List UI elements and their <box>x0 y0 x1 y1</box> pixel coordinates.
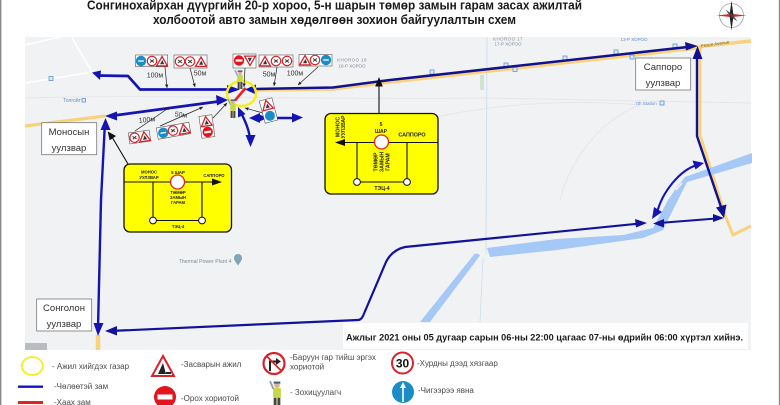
date notice <box>343 323 748 349</box>
distance labels <box>138 70 303 125</box>
legend: go straight <box>392 381 474 403</box>
location label text: уулзвар <box>52 143 86 154</box>
callout panel: junction scheme west: УУЛЗВАР <box>139 175 159 180</box>
callout panel: junction scheme east <box>325 114 438 194</box>
distance labels: 100м <box>287 70 303 78</box>
legend: road works <box>152 356 242 376</box>
map labels <box>25 36 730 350</box>
local bypass arrows <box>238 107 303 147</box>
map labels: Thermal Power Plant 4 <box>179 259 231 265</box>
legend: no right turn: -Баруун гар тийш эргэх <box>290 353 376 362</box>
roads <box>25 41 751 350</box>
sign panel F <box>128 130 151 144</box>
route: main top line <box>92 42 698 94</box>
legend: work site <box>22 357 130 375</box>
legend: open road: -Чөлөөтэй зам <box>54 382 108 391</box>
map labels: 17-Р ХОРОО <box>494 42 522 46</box>
map <box>25 37 751 350</box>
location label text: Сонголон <box>43 303 85 314</box>
map labels: 13-Р ХОРОО <box>620 37 648 42</box>
sign panel G <box>156 122 191 139</box>
distance labels: 50м <box>174 111 188 120</box>
callout panel: junction scheme east: МОНОС <box>336 117 342 137</box>
callout panel: junction scheme east: УУЛЗВАР <box>341 115 347 138</box>
route: lower and left lines <box>94 95 228 336</box>
legend: speed limit <box>392 352 498 374</box>
route: east line <box>652 46 726 219</box>
traffic officers <box>228 70 243 118</box>
callout panel: junction scheme west: МОНОС <box>141 170 157 174</box>
map labels: KHOROO 18 <box>337 58 367 62</box>
callout panel: junction scheme west: ТӨМӨР <box>170 190 186 195</box>
map labels: Peace Avenue <box>700 39 730 48</box>
location label text: Моносын <box>49 127 89 138</box>
legend: no right turn: хориотой <box>290 362 324 372</box>
map labels: 18-Р ХОРОО <box>338 64 366 68</box>
map labels: 7th Station <box>635 101 657 106</box>
legend: traffic officer <box>270 381 341 405</box>
sign panel I <box>259 98 278 123</box>
legend: no right turn <box>264 353 376 374</box>
legend: road works: -Засварын ажил <box>181 360 242 369</box>
distance labels: 50м <box>263 72 275 78</box>
title: холбоотой авто замын хөдөлгөөн зохион байгуулалтын схем <box>153 13 516 27</box>
location label text <box>43 62 682 330</box>
location label text: уулзвар <box>47 319 81 330</box>
closure zone <box>227 81 256 106</box>
callout panel: junction scheme east: ГАРАМ <box>386 153 392 171</box>
distance labels: 50м <box>194 70 206 78</box>
sign panel D <box>259 55 293 67</box>
sign panel E <box>299 54 332 66</box>
callout panel: junction scheme west: ЗАМЫН <box>170 195 186 200</box>
callout panel: junction scheme east: ТЭЦ-4 <box>374 186 390 192</box>
legend: speed limit: -Хурдны дээд хязгаар <box>417 359 498 368</box>
legend: no entry <box>154 386 239 405</box>
location labels <box>37 58 691 331</box>
sign pointers <box>135 67 318 131</box>
callout panel: junction scheme east: ШАР <box>375 129 388 135</box>
location label text: уулзвар <box>646 78 680 89</box>
legend: work site: - Ажил хийгдэх газар <box>52 362 130 371</box>
sign panel C <box>233 54 256 68</box>
map labels: Толгойт <box>63 97 82 104</box>
legend: no entry: -Орох хориотой <box>181 394 239 403</box>
title <box>87 0 582 27</box>
callout panel: junction scheme west: ГАРАМ <box>171 200 186 205</box>
callout panel: junction scheme east: 5 <box>380 122 383 128</box>
sign panel B <box>174 55 207 68</box>
callout panel: junction scheme west: 5 ШАР <box>171 170 185 175</box>
legend: go straight: -Чигээрээ явна <box>418 386 474 395</box>
location label text: Саппоро <box>644 62 682 73</box>
sign panel H <box>199 115 215 138</box>
distance labels: 100м <box>138 116 156 125</box>
callout panel: junction scheme west: ТЭЦ-4 <box>172 224 185 229</box>
callout arrows <box>108 78 382 164</box>
legend: traffic officer: - Зохицуулагч <box>290 388 341 397</box>
icon: compass <box>716 0 746 30</box>
callout panel: junction scheme east: ЗАМЫН <box>380 152 386 172</box>
legend: open road <box>18 382 108 391</box>
map labels: KHOROO 17 <box>493 36 523 42</box>
legend: closed road <box>18 398 91 405</box>
distance labels: 100м <box>147 72 163 80</box>
callout panel: junction scheme east: ТӨМӨР <box>374 152 380 172</box>
legend: speed limit: 30 <box>396 356 409 370</box>
sign panel A <box>136 55 168 67</box>
callout panel: junction scheme east: САППОРО <box>398 132 426 138</box>
callout panel: junction scheme west <box>124 164 232 232</box>
callout panel: junction scheme west: САППОРО <box>203 173 225 178</box>
river <box>420 153 752 322</box>
date notice: Ажлыг 2021 оны 05 дугаар сарын 06-ны 22:00 цагаас 07-ны өдрийн 06:00 хүртэл хийнэ. <box>346 332 743 344</box>
route: south detour <box>105 214 724 336</box>
